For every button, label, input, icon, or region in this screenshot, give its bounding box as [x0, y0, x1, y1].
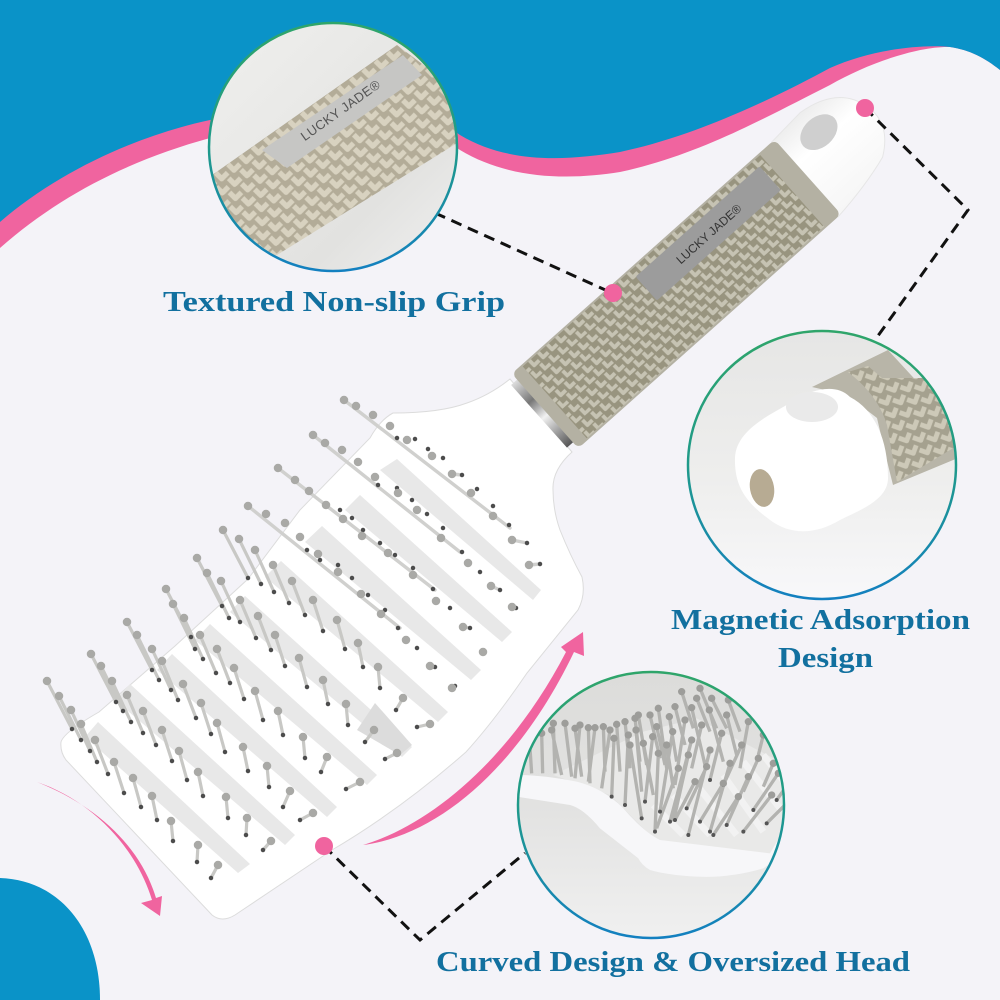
heading: Magnetic Adsorption Design: Magnetic Adsorption [671, 604, 970, 636]
metal plate: LUCKY JADE® [673, 201, 745, 267]
bristle balls [47, 400, 529, 865]
textured grip [512, 140, 841, 448]
dashed connector: grip [435, 213, 612, 293]
hanging hole [793, 107, 845, 157]
brush surface [554, 718, 780, 784]
curve arrow left [37, 782, 162, 916]
curve arrow right [363, 632, 584, 845]
brush head [61, 379, 583, 919]
bristle sockets [72, 438, 540, 878]
pink wave band [0, 0, 1000, 248]
heading: Curved Design and Oversized Head: Curved Design & Oversized Head [436, 946, 910, 978]
dashed connector: magnet [865, 108, 968, 340]
blue wave header [0, 0, 1000, 222]
handle cap [770, 76, 910, 217]
heading: Textured Non-slip Grip: Textured Non-slip Grip [163, 286, 505, 318]
bristle pins [47, 400, 540, 878]
brush handle [504, 76, 910, 454]
heading: Magnetic Adsorption Design [671, 604, 970, 674]
dashed connector: head [324, 846, 525, 940]
pins [530, 688, 785, 835]
pink marker dots [315, 99, 874, 855]
metal plate [636, 166, 781, 301]
brush [47, 76, 910, 919]
blue corner circle [0, 878, 100, 1000]
panel: curved head detail circle [517, 672, 787, 938]
heading: Magnetic Adsorption Design: Design [778, 642, 873, 674]
panel: grip detail circle: LUCKY JADE® [298, 77, 383, 144]
panel: grip detail circle [205, 23, 470, 271]
panel: magnet detail circle [688, 331, 958, 599]
